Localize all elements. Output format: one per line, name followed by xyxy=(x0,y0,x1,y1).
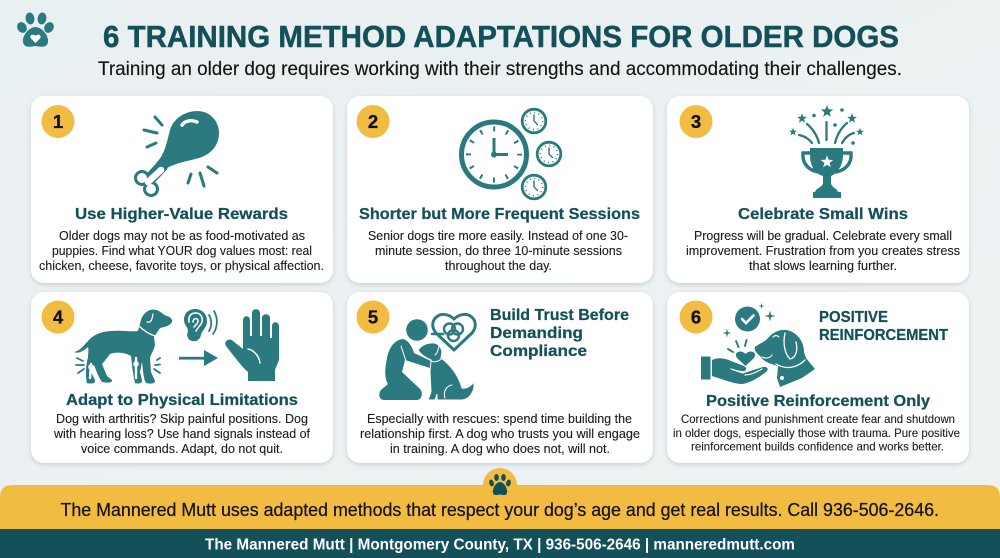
body text: with hearing loss? Use hand signals instead of xyxy=(53,426,310,441)
icon: hand signal xyxy=(225,309,279,381)
body text: Dog with arthritis? Skip painful positions. Dog xyxy=(56,411,308,426)
body text: minute session, do three 10-minute sessions xyxy=(375,243,622,258)
body text: puppies. Find what YOUR dog values most: real xyxy=(52,243,312,258)
panel: 2 shorter sessions xyxy=(347,96,653,283)
heading xyxy=(490,307,629,360)
number badge 6 xyxy=(680,300,712,334)
call to action band xyxy=(0,468,1000,529)
heading: Shorter but More Frequent Sessions xyxy=(359,206,640,223)
subtitle: Training an older dog requires working with their strengths and accommodating their challenges. xyxy=(98,58,902,80)
number badge 1: 1 xyxy=(53,111,63,132)
icon: clocks xyxy=(462,109,561,199)
number badge 4 xyxy=(42,300,74,334)
call to action text: The Mannered Mutt uses adapted methods that respect your dog’s age and get real results. Call 936-506-2646. xyxy=(60,500,939,520)
body text: Especially with rescues: spend time building the xyxy=(367,411,632,426)
number badge 2: 2 xyxy=(368,111,378,132)
number badge 1 xyxy=(42,105,74,138)
body text xyxy=(53,411,310,456)
logo: paw with heart xyxy=(15,12,56,47)
body text: Corrections and punishment create fear and shutdown xyxy=(681,412,955,426)
label: positive reinforcement xyxy=(819,309,948,344)
body text: voice commands. Adapt, do not quit. xyxy=(81,441,283,456)
body text xyxy=(368,228,628,273)
heading: Compliance xyxy=(490,343,587,360)
number badge 2 xyxy=(356,105,390,138)
number badge 5 xyxy=(356,300,390,334)
footer bar xyxy=(0,529,1000,558)
body text: improvement. Frustration from you creates stress xyxy=(686,243,960,258)
panel: 6 positive reinforcement xyxy=(667,292,969,463)
heading: Demanding xyxy=(490,325,583,342)
icon: person and dog with heart xyxy=(379,314,475,400)
body text: that slows learning further. xyxy=(749,258,897,273)
body text xyxy=(673,412,960,454)
heading: Adapt to Physical Limitations xyxy=(66,392,298,409)
panel: 5 build trust xyxy=(347,292,653,463)
body text: reinforcement builds confidence and works better. xyxy=(691,440,944,454)
icon: dog with sore joints xyxy=(74,310,172,384)
body text: Progress will be gradual. Celebrate every small xyxy=(694,228,952,243)
icon: trophy with stars xyxy=(789,105,864,198)
heading: Build Trust Before xyxy=(490,307,629,324)
icon: ear xyxy=(184,309,217,341)
body text xyxy=(360,411,640,456)
body text: in older dogs, especially those with trauma. Pure positive xyxy=(673,426,960,440)
icon: hand, heart and dog xyxy=(701,303,815,387)
body text: throughout the day. xyxy=(445,258,552,273)
panel: 1 use higher-value rewards xyxy=(31,96,333,283)
arrow xyxy=(179,350,218,366)
panel: 3 celebrate small wins xyxy=(667,96,969,283)
label: positive reinforcement: REINFORCEMENT xyxy=(819,327,948,344)
number badge 5: 5 xyxy=(368,306,378,328)
body text: Older dogs may not be as food-motivated as xyxy=(59,228,305,243)
label: positive reinforcement: POSITIVE xyxy=(819,309,888,326)
number badge 4: 4 xyxy=(53,306,64,328)
title: 6 TRAINING METHOD ADAPTATIONS FOR OLDER DOGS xyxy=(103,19,899,54)
number badge 3: 3 xyxy=(691,111,701,132)
body text: Senior dogs tire more easily. Instead of one 30- xyxy=(368,228,628,243)
heading: Use Higher-Value Rewards xyxy=(75,206,288,223)
body text: relationship first. A dog who trusts you will engage xyxy=(360,426,640,441)
body text xyxy=(686,228,960,273)
number badge 3 xyxy=(680,105,712,138)
body text xyxy=(39,228,324,273)
heading: Celebrate Small Wins xyxy=(738,206,908,223)
heading: Positive Reinforcement Only xyxy=(706,393,930,410)
footer text: The Mannered Mutt | Montgomery County, TX | 936-506-2646 | manneredmutt.com xyxy=(205,536,795,554)
number badge 6: 6 xyxy=(691,306,701,328)
panel: 4 adapt to physical limitations xyxy=(31,292,333,463)
icon: paw xyxy=(488,474,512,495)
body text: in training. A dog who does not, will not. xyxy=(390,441,610,456)
icon: chicken drumstick xyxy=(134,111,219,197)
body text: chicken, cheese, favorite toys, or physical affection. xyxy=(39,258,324,273)
